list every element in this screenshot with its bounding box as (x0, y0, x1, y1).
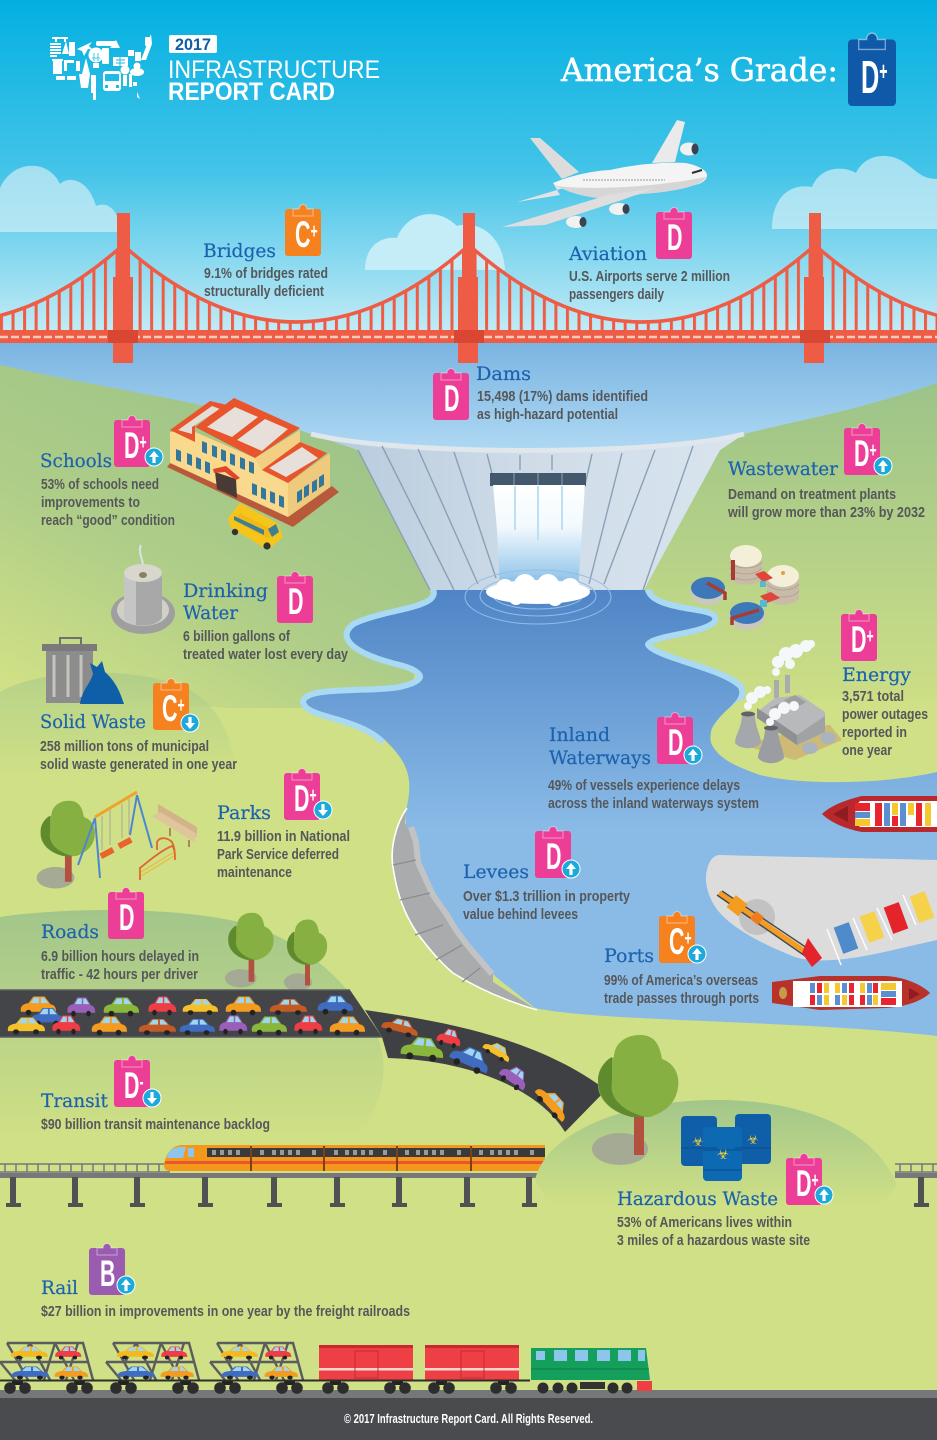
heading: Transit (41, 1090, 108, 1112)
logo year box: 2017 (175, 35, 211, 54)
icon: overall grade clipboard (848, 33, 896, 106)
grade icon (277, 572, 313, 623)
main cables (0, 245, 937, 322)
grade icon (285, 204, 321, 256)
text: across the inland waterways system (548, 795, 759, 812)
icon: overall grade clipboard: + (879, 58, 888, 86)
grade icon: D (851, 620, 866, 661)
dam crest (311, 434, 744, 450)
school bus (228, 503, 283, 550)
text: maintenance (217, 864, 292, 881)
pump houses (755, 571, 780, 607)
panel: levees (463, 826, 631, 923)
factory (757, 695, 825, 745)
suspender cables (0, 245, 937, 335)
golden gate bridge (0, 213, 937, 363)
panel: inland waterways (548, 712, 759, 812)
swing set (78, 792, 152, 878)
traffic (8, 996, 573, 1125)
heading: Roads (41, 921, 99, 943)
grade icon: + (811, 1167, 819, 1192)
chimney smoke (772, 640, 815, 676)
port land (706, 855, 937, 967)
heading: Wastewater (728, 458, 839, 480)
school door (215, 472, 237, 498)
school walls (170, 432, 288, 517)
heading: Bridges (203, 240, 276, 262)
tower smoke (744, 686, 799, 726)
water tank (111, 545, 175, 634)
text: 53% of Americans lives within (617, 1214, 792, 1231)
panel: aviation (568, 208, 730, 303)
text: value behind levees (463, 906, 578, 923)
road hill (0, 910, 383, 1135)
grade icon (284, 768, 320, 820)
river and lake (306, 588, 937, 1036)
dam (311, 434, 744, 624)
heading: Drinking (183, 580, 268, 602)
text: traffic - 42 hours per driver (41, 966, 198, 983)
storage tank 1 (730, 545, 762, 585)
river water (306, 588, 937, 1036)
logo wordmark: REPORT CARD (168, 78, 335, 106)
tailplane (517, 183, 567, 202)
text: 3,571 total (842, 688, 904, 705)
text: 53% of schools need (41, 476, 159, 493)
grade icon: + (684, 925, 692, 950)
text: 6 billion gallons of (183, 628, 291, 645)
locomotive (531, 1348, 652, 1394)
text: 6.9 billion hours delayed in (41, 948, 199, 965)
waterfall (493, 485, 585, 590)
grade icon: D (444, 379, 459, 420)
grade icon: + (177, 692, 185, 717)
sky background (0, 0, 937, 345)
text: one year (842, 742, 892, 759)
trend arrow up (145, 448, 163, 466)
right roof (262, 442, 327, 483)
trend arrow up (684, 746, 702, 764)
towers (113, 213, 824, 363)
panel: hazardous waste (617, 1154, 833, 1249)
heading: Energy (842, 664, 911, 686)
grade icon: D (124, 1066, 139, 1107)
text: 3 miles of a hazardous waste site (617, 1232, 810, 1249)
grade icon (657, 712, 693, 764)
main roof (195, 398, 300, 458)
ripples (465, 570, 611, 624)
grade icon: + (869, 437, 877, 462)
grade icon: D (854, 434, 869, 475)
main wing (502, 188, 655, 227)
clarifier 1 (690, 577, 726, 605)
footer bar (0, 1398, 937, 1440)
wing engines (566, 203, 630, 228)
clarifier 2 (729, 602, 765, 630)
hazardous waste barrels: ☣ (717, 1147, 729, 1163)
grade icon: D (668, 723, 683, 764)
text: Park Service deferred (217, 846, 339, 863)
ship: top (822, 796, 937, 832)
foam (486, 574, 590, 606)
grade icon: + (310, 218, 318, 243)
red boxcars (319, 1345, 519, 1394)
text: reported in (842, 724, 907, 741)
grade icon: C (162, 689, 177, 730)
heading: Ports (604, 945, 654, 967)
trash can and bag (42, 638, 124, 704)
land: upper left hill (0, 365, 440, 708)
panel: rail (41, 1244, 410, 1320)
grade icon (844, 424, 880, 475)
panel: energy (841, 610, 928, 759)
crane (717, 891, 822, 967)
hazardous waste barrels: ☣ (692, 1135, 704, 1150)
text: $90 billion transit maintenance backlog (41, 1116, 270, 1133)
school building (167, 398, 339, 527)
text: passengers daily (569, 286, 665, 303)
cooling towers (735, 712, 784, 763)
passenger train (164, 1145, 545, 1171)
grade icon: D (546, 837, 561, 878)
school windows (176, 441, 324, 508)
text: Over $1.3 trillion in property (463, 888, 631, 905)
hazardous waste barrels: ☣ (747, 1133, 759, 1148)
text: 258 million tons of municipal (40, 738, 209, 755)
text: $27 billion in improvements in one year by the freight railroads (41, 1303, 410, 1320)
grade icon (841, 610, 877, 661)
left roof (170, 401, 227, 442)
airplane (502, 120, 707, 228)
trend arrow down (181, 714, 199, 732)
river shore highlight (306, 588, 739, 740)
trend arrow up (874, 457, 892, 475)
tail fin (652, 120, 685, 163)
grade icon: D (119, 898, 134, 939)
land: base (0, 455, 937, 1400)
grade icon (433, 368, 469, 420)
heading: Water (183, 602, 239, 624)
rear wing (530, 138, 579, 179)
logo map of USA made from icons (50, 34, 152, 100)
levee wall (392, 808, 537, 1010)
grade icon: + (866, 623, 874, 648)
text: reach “good” condition (41, 512, 175, 529)
panel: bridges (203, 204, 328, 300)
top engine (680, 142, 698, 156)
large tree (592, 1035, 678, 1165)
panel: solid waste (40, 678, 237, 773)
grade icon: D (796, 1164, 811, 1205)
text: 9.1% of bridges rated (204, 265, 328, 282)
text: treated water lost every day (183, 646, 349, 663)
tree (37, 801, 95, 888)
bench (152, 804, 197, 847)
car carriers (0, 1343, 303, 1394)
text: 15,498 (17%) dams identified (477, 388, 648, 405)
grade icon: D (294, 779, 309, 820)
grade icon: B (100, 1254, 115, 1295)
panel: transit (41, 1056, 270, 1133)
elevated rail bridge (0, 1164, 937, 1207)
text: 11.9 billion in National (217, 828, 350, 845)
heading: Dams (476, 363, 531, 385)
grade icon: - (139, 1069, 144, 1094)
heading: Inland (549, 724, 610, 746)
heading: Waterways (549, 747, 651, 769)
trend arrow up (562, 860, 580, 878)
text: as high-hazard potential (477, 406, 618, 423)
grade icon: + (139, 429, 147, 454)
grade icon (114, 1056, 150, 1107)
icon: overall grade clipboard: D (861, 51, 879, 103)
deck (0, 330, 937, 343)
grade icon: D (288, 582, 303, 623)
grade icon: D (667, 218, 682, 259)
chimneys (774, 675, 790, 698)
panel: parks (217, 768, 350, 881)
text: Demand on treatment plants (728, 486, 896, 503)
heading: Aviation (568, 243, 647, 265)
trend arrow up (815, 1186, 833, 1204)
land: upper right hill (640, 383, 937, 720)
grade icon (786, 1154, 822, 1205)
small tanks (802, 732, 836, 754)
grade icon (535, 826, 571, 878)
clouds (0, 156, 937, 270)
grade icon: C (669, 922, 684, 963)
text: U.S. Airports serve 2 million (569, 268, 730, 285)
heading: Rail (41, 1277, 78, 1299)
spillway gates (490, 473, 586, 486)
heading: Levees (463, 861, 529, 883)
dam body (311, 434, 744, 590)
highway (0, 990, 606, 1132)
heading: Solid Waste (40, 711, 146, 733)
grade icon (114, 416, 150, 467)
panel: wastewater (727, 424, 925, 521)
playground (37, 792, 197, 888)
shipping containers (827, 891, 934, 965)
footer copyright: © 2017 Infrastructure Report Card. All Rights Reserved. (344, 1412, 593, 1426)
hazardous waste hill (535, 1100, 897, 1205)
grade icon (89, 1244, 125, 1295)
trend arrow up (117, 1276, 135, 1294)
reservoir water (0, 342, 937, 467)
text: 49% of vessels experience delays (548, 777, 740, 794)
grade icon: D (124, 426, 139, 467)
land: solid waste hill (0, 673, 236, 775)
school base (167, 461, 339, 527)
grade icon (656, 208, 692, 259)
fuselage (553, 163, 707, 198)
grade icon: + (309, 782, 317, 807)
ground (742, 725, 842, 760)
trend arrow up (688, 945, 706, 963)
roadside trees (225, 913, 327, 991)
grade icon (659, 912, 695, 963)
panel: dams (433, 363, 648, 423)
panel: schools (40, 416, 175, 529)
text: improvements to (41, 494, 140, 511)
logo (50, 34, 152, 100)
ground strip (0, 1390, 937, 1399)
title: America's Grade: America’s Grade: (560, 51, 838, 89)
grade icon (108, 888, 144, 939)
grade icon (153, 678, 189, 730)
heading: Hazardous Waste (617, 1188, 778, 1210)
panel: roads (41, 888, 199, 983)
grade icon: C (295, 215, 310, 256)
climber (140, 838, 175, 880)
freight train (0, 1343, 652, 1394)
power plant (735, 640, 842, 763)
text: trade passes through ports (604, 990, 759, 1007)
text: structurally deficient (204, 283, 324, 300)
wastewater treatment plant (690, 545, 799, 630)
panel: ports (604, 912, 759, 1007)
energy island (710, 700, 937, 779)
trend arrow down (143, 1089, 161, 1107)
ship: bottom (772, 976, 930, 1010)
trend arrow down (314, 801, 332, 819)
heading: Schools (40, 450, 112, 472)
hazardous waste barrels (681, 1114, 771, 1181)
panel: drinking water (183, 572, 349, 663)
text: solid waste generated in one year (40, 756, 237, 773)
storage tank 2 (767, 565, 799, 605)
heading: Parks (217, 802, 271, 824)
text: 99% of America’s overseas (604, 972, 758, 989)
logo wordmark: INFRASTRUCTURE (168, 56, 380, 84)
